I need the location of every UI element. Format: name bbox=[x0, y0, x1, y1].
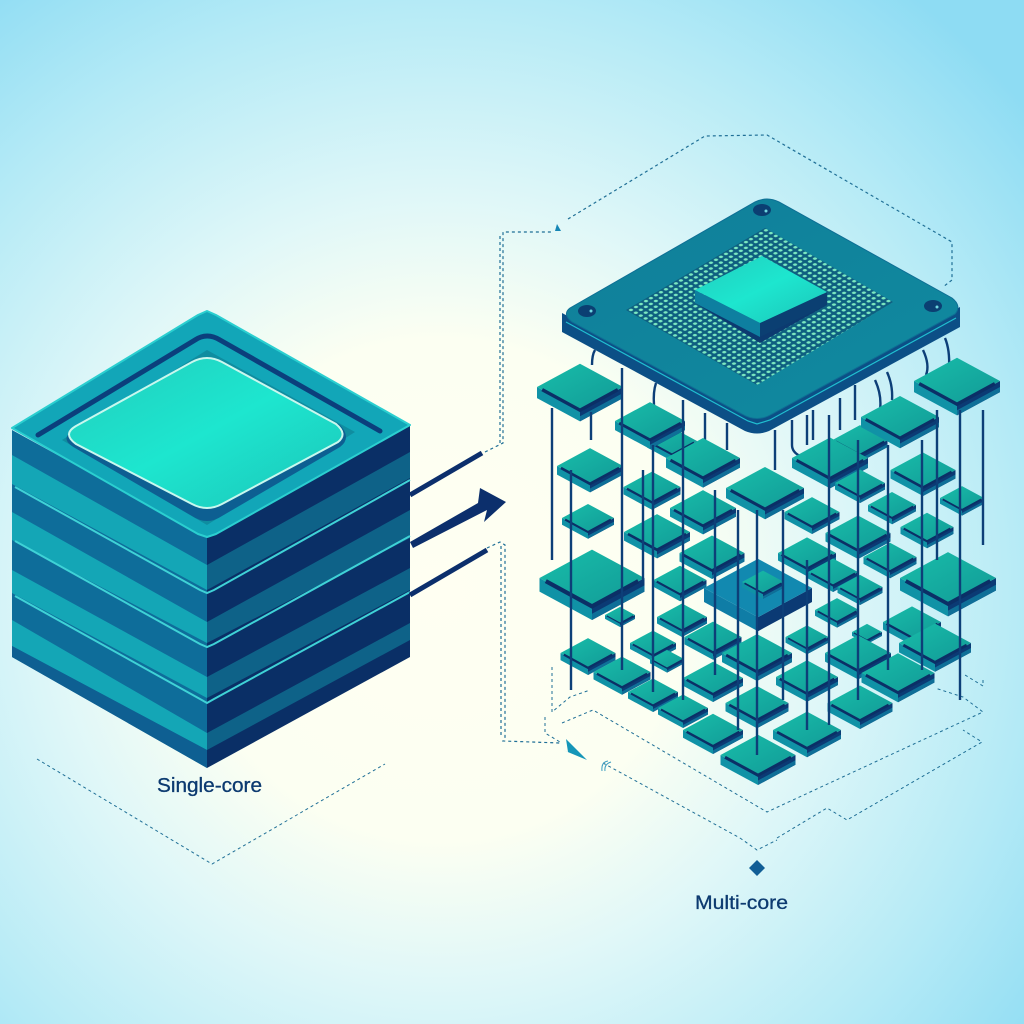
cores: fourth tier bbox=[605, 598, 941, 660]
dashed outlines under multi-core grid bbox=[545, 667, 983, 850]
package lower highlight bbox=[566, 318, 956, 424]
label: multi-core: Multi-core bbox=[695, 893, 788, 914]
chip shadow rim bbox=[66, 357, 346, 521]
multi-core: vertical wires bbox=[552, 368, 983, 755]
mounting hole right bbox=[924, 300, 942, 312]
dashed bracket: single-core bbox=[37, 759, 385, 864]
multi-core: curved back wires bbox=[592, 338, 949, 470]
cores: bottom-right edge row bbox=[720, 624, 971, 785]
cores: third tier bbox=[624, 514, 916, 605]
central diamond marker bbox=[749, 860, 765, 876]
teal arrowhead on lower connector bbox=[563, 739, 587, 760]
die shadow bbox=[695, 295, 827, 343]
arrow 2 with head bbox=[410, 488, 506, 548]
single-core chip stack bbox=[12, 311, 410, 768]
stack left face layers bbox=[12, 430, 207, 768]
single core chip bbox=[69, 358, 343, 508]
mounting hole top bbox=[753, 204, 771, 216]
stack right face layers bbox=[207, 425, 410, 768]
arrow 1 bbox=[410, 453, 482, 495]
cores: second tier bbox=[562, 470, 984, 548]
cores: bottom-left edge row bbox=[560, 638, 743, 754]
small triangle on upper connector bbox=[555, 224, 561, 231]
dashed connector: upper path to multi-core bbox=[485, 135, 952, 452]
label: single-core: Single-core bbox=[157, 775, 262, 797]
package rim bbox=[562, 307, 960, 434]
mounting hole left bbox=[578, 305, 596, 317]
die left side bbox=[695, 290, 760, 337]
arrow 3 bbox=[410, 550, 487, 595]
cores: upper tier bbox=[557, 402, 956, 496]
contact dot grid bbox=[626, 228, 893, 385]
die top bbox=[695, 256, 827, 323]
dashed connector: lower path to multi-core bbox=[487, 542, 560, 743]
package top face bbox=[566, 199, 958, 418]
stack top face bbox=[12, 311, 410, 537]
recess groove bbox=[38, 336, 380, 435]
multi-core: large foreground cores bbox=[537, 358, 1000, 631]
cores: fifth tier bbox=[630, 631, 891, 728]
small arcs near dashed outline bbox=[602, 761, 611, 771]
CPU package bbox=[562, 199, 960, 434]
recess floor bbox=[62, 350, 355, 525]
stack layer separators bbox=[15, 480, 410, 703]
die right side bbox=[760, 292, 827, 337]
